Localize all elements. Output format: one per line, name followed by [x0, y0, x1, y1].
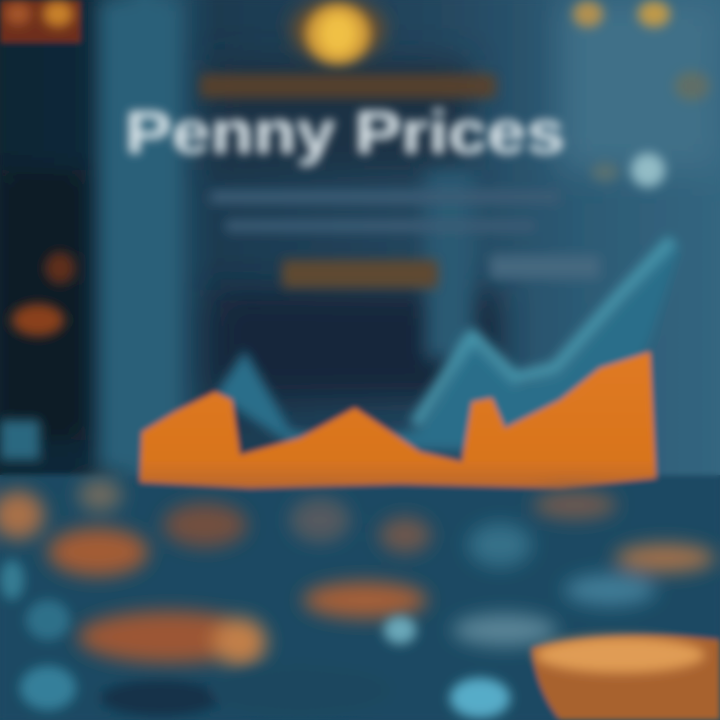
chart: area and line [140, 240, 680, 488]
subtitle bar [200, 74, 496, 98]
title: Penny Prices [125, 99, 565, 166]
button label [282, 260, 438, 288]
area series [140, 352, 656, 488]
token: orange lower left [78, 582, 427, 666]
token: orange lower right [532, 636, 720, 720]
marker dot [591, 153, 665, 187]
highlights [0, 560, 510, 718]
left orange marks [12, 252, 75, 336]
lights: top corners [0, 0, 710, 101]
lamp: top centre glow [292, 0, 384, 64]
text block: description [210, 190, 600, 279]
line series [215, 240, 680, 450]
foreground: blurred tokens [0, 479, 720, 720]
